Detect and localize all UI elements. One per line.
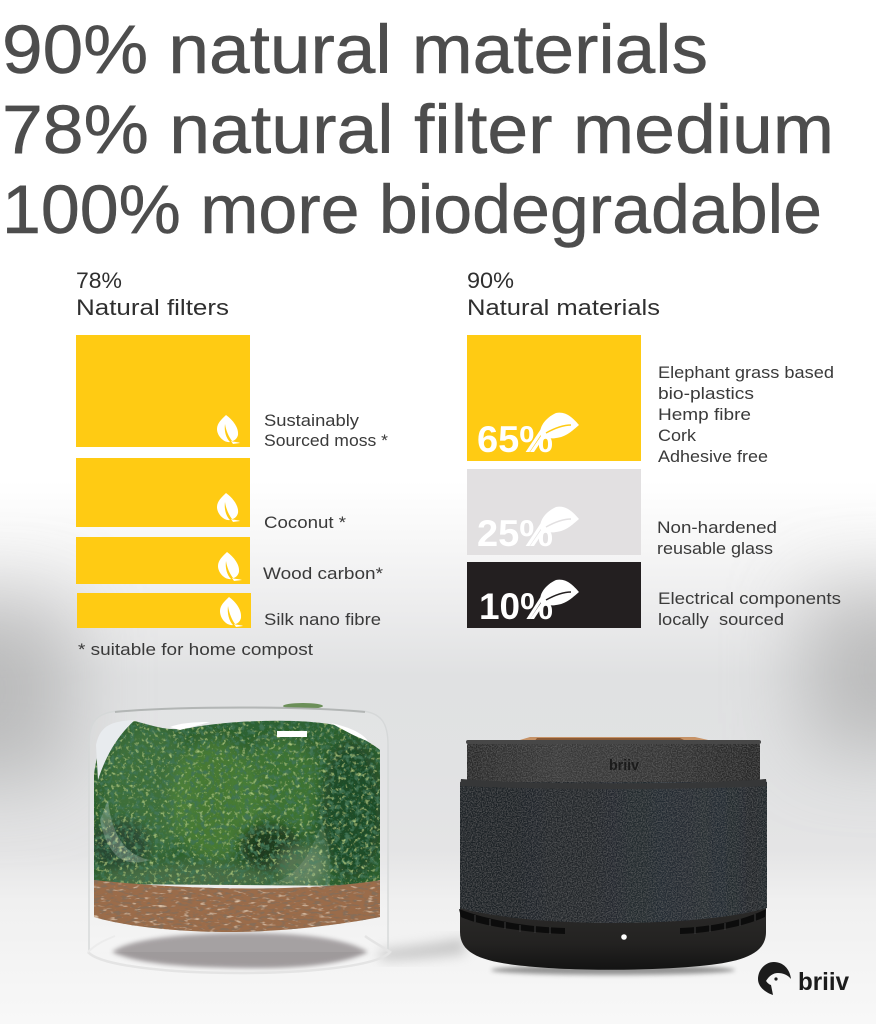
title	[2, 11, 834, 248]
title: 90% natural materials	[2, 11, 708, 88]
bar: moss	[76, 335, 250, 447]
photo: briiv purifier	[459, 737, 767, 975]
icon: leaf silk	[220, 597, 243, 627]
icon: leaf coconut	[217, 493, 240, 522]
heading: natural filters: Natural filters	[76, 295, 229, 320]
jar shadow	[112, 933, 368, 968]
bar: 25%: 25%	[477, 513, 553, 554]
bar: 65%: 65%	[477, 419, 553, 460]
logo: briiv	[758, 962, 849, 996]
wordmark: briiv	[798, 968, 849, 996]
heading: natural filters: 78%	[76, 268, 122, 293]
heading: natural materials: Natural materials	[467, 295, 660, 320]
bar: 25%	[467, 469, 641, 555]
led	[621, 934, 627, 940]
labels: materials: locally sourced	[658, 610, 784, 629]
cork top	[513, 737, 717, 742]
labels: filters: Sourced moss *	[264, 431, 388, 450]
device wordmark: briiv	[609, 758, 639, 774]
labels: materials: Hemp fibre	[658, 405, 751, 424]
labels: filters	[263, 411, 388, 629]
glass jar	[89, 708, 388, 952]
vents	[459, 909, 565, 934]
labels: materials: bio-plastics	[658, 384, 754, 403]
icon: leaf moss	[217, 415, 240, 444]
top ring	[467, 740, 760, 782]
labels: filters: Coconut *	[264, 513, 346, 532]
panel: natural filters	[76, 268, 388, 659]
labels: filters: Silk nano fibre	[264, 610, 381, 629]
glass highlights	[170, 722, 210, 730]
icon: leaf wood carbon	[218, 552, 242, 581]
bar: 10%: 10%	[479, 586, 553, 627]
moss tuft on rim	[283, 703, 323, 709]
labels: materials: Non-hardened	[657, 518, 777, 537]
base shadow	[491, 965, 735, 975]
bar: coconut	[76, 458, 250, 527]
moss	[90, 715, 385, 892]
bar: 65%	[467, 335, 641, 461]
labels: materials: Electrical components	[658, 589, 841, 608]
vent ribs	[475, 914, 755, 934]
labels: materials: reusable glass	[657, 539, 773, 558]
photo: glass jar with moss	[88, 703, 465, 973]
labels: materials	[657, 363, 841, 629]
bar: wood carbon	[76, 537, 250, 584]
labels: materials: Adhesive free	[658, 447, 768, 466]
title: 100% more biodegradable	[2, 171, 822, 248]
labels: filters: Sustainably	[264, 411, 360, 430]
panel: natural materials	[467, 268, 841, 629]
labels: filters: Wood carbon*	[263, 564, 383, 583]
footnote: * suitable for home compost	[78, 640, 313, 659]
heading: natural materials	[467, 268, 660, 320]
bar: 10%	[467, 562, 641, 628]
fabric band	[460, 782, 767, 923]
bar: silk	[77, 593, 251, 628]
heading: natural filters	[76, 268, 229, 320]
coconut layer	[94, 880, 380, 932]
labels: materials: Cork	[658, 426, 697, 445]
icon: bird	[758, 962, 791, 995]
base	[460, 905, 766, 970]
title: 78% natural filter medium	[2, 91, 834, 168]
collar	[460, 779, 767, 789]
heading: natural materials: 90%	[467, 268, 514, 293]
labels: materials: Elephant grass based	[658, 363, 834, 382]
